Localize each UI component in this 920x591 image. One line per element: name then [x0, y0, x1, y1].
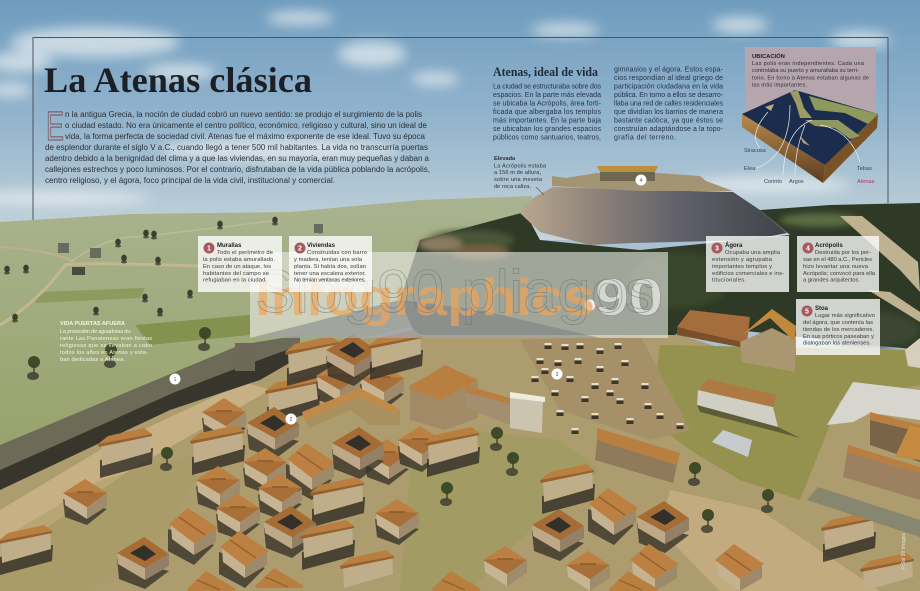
callout: Acrópolis: Acrópolis; convocó para ella: [803, 271, 876, 277]
map block: [742, 90, 878, 183]
callout: Acrópolis: 4: [806, 246, 810, 252]
drop cap: E: [46, 103, 64, 149]
panel: location: torio. En torno a Atenas estaban algunas de: [752, 76, 869, 82]
callout: Ágora: Ágora: [725, 242, 743, 249]
note: Elevada: de roca caliza.: [494, 184, 531, 190]
marker 1 on the wall: [170, 374, 180, 384]
callout: Viviendas: planta. Si había dos, solían: [294, 264, 366, 270]
callout: Ágora: edificios comerciales e ins-: [712, 271, 784, 277]
intro text: de esplendor durante el siglo V a.C., cuando llegó a tener 500 mil habitantes. La vida no transcurría puertas: [45, 143, 428, 152]
panel: location: UBICACIÓN: [752, 52, 785, 60]
column text right: que dividían los barrios de manera: [614, 109, 723, 116]
intro text: centro religioso, y el ágora, foco principal de la vida civil, institucional y comercial.: [45, 176, 335, 185]
note: Vida puertas afuera: [60, 321, 152, 363]
column text left: [493, 84, 602, 142]
column text right: gimnasios y el ágora. Estos espa-: [614, 66, 724, 74]
background: ground of the city: [0, 335, 920, 591]
background: green hills: [0, 196, 532, 470]
column text right: bastante caótica, ya que éstos se: [614, 118, 723, 124]
callout: Viviendas: tener una escalera exterior.: [294, 271, 366, 277]
image credit: © Sol 90 Images: [900, 532, 907, 570]
column text left: ficada que albergaba los templos: [493, 109, 602, 116]
marker 1 on the wall: 1: [174, 377, 177, 383]
callout: Ágora: importantes templos y: [712, 264, 772, 270]
callout: Murallas: [198, 236, 282, 292]
background: sky with clouds: [0, 0, 920, 240]
column text left: La ciudad se estructuraba sobre dos: [493, 84, 602, 90]
marker 4 on the acropolis: 4: [640, 178, 643, 184]
watermark band: Infographics: [255, 269, 595, 327]
city houses: [0, 330, 914, 591]
map labels: Tebas: [857, 166, 872, 172]
map labels: [744, 148, 875, 185]
note: Vida puertas afuera: ban dedicadas a Atenea.: [60, 357, 125, 363]
callout: Stoa: En sus pórticos paseaban y: [803, 334, 874, 340]
note: Vida puertas afuera: rante Las Panateneas eran fiestas: [60, 336, 152, 342]
callout: Murallas: refugiaban en la ciudad.: [203, 278, 267, 284]
callout: Stoa: 5: [805, 308, 809, 316]
callout: Ágora: extensión y agrupaba: [712, 257, 773, 263]
markers 2, 3 and 5: 3: [556, 372, 559, 378]
callout: Viviendas: y madera, tenían una sola: [294, 257, 363, 263]
markers 2, 3 and 5: 2: [290, 417, 293, 423]
callout: Acrópolis: Acrópolis: [815, 243, 843, 249]
map labels: Siracusa: [744, 148, 767, 154]
column text right: participación ciudadana en la vida: [614, 84, 723, 90]
callout: Stoa: Lugar más significativo: [815, 313, 875, 319]
callout: Murallas: Todo el perímetro de: [217, 250, 273, 256]
intro text: vida, la forma perfecta de sociedad civil. Atenas fue el máximo exponente de ese ideal. Tuvo su época: [65, 132, 426, 141]
column text left: espacios. En la parte más elevada: [493, 92, 601, 99]
callout: Ágora: Ocupaba una amplia: [725, 250, 781, 256]
large public buildings: [302, 309, 920, 537]
callout: Viviendas: No tenían ventanas exteriores.: [294, 278, 366, 284]
note: Vida puertas afuera: religiosas que se llevaban a cabo: [60, 343, 152, 349]
intro text: adentro debido a la benignidad del clima y a que las viviendas, en su mayoría, eran muy pequeñas y daban a: [45, 154, 430, 163]
callout: Acrópolis: hizo levantar una nueva: [803, 264, 869, 270]
callout: Viviendas: Construidas con barro: [307, 250, 367, 256]
callout: Murallas: habitantes del campo se: [203, 271, 269, 277]
panel: location: Las polis eran independientes. Cada una: [752, 61, 865, 67]
column text right: grafía del terreno.: [614, 134, 676, 142]
column text left: se ubicaban los grandes espacios: [493, 126, 602, 133]
callout: Murallas: Murallas: [217, 243, 242, 249]
callout: Ágora: 3: [715, 246, 719, 252]
callout: Stoa: del ágora, que contenía las: [803, 320, 873, 326]
column text right: construían adaptándose a la topo-: [614, 126, 724, 133]
heading: Atenas, ideal de vida: Atenas, ideal de vida: [493, 65, 599, 79]
map labels: Corinto: [764, 179, 782, 185]
callout: Acrópolis: a grandes arquitectos.: [803, 278, 860, 284]
callout: Viviendas: Viviendas: [307, 243, 336, 249]
panel: location: las más importantes.: [752, 82, 807, 88]
callout: Ágora: titucionales.: [712, 278, 746, 284]
callout: Viviendas: [289, 236, 372, 292]
callout: Murallas: la polis estaba amurallado.: [203, 257, 275, 263]
note: Vida puertas afuera: La procesión de aguadoras du-: [60, 329, 132, 335]
acropolis rock and temple: [520, 166, 787, 245]
map labels: Argos: [789, 179, 804, 185]
frame line: [33, 38, 888, 220]
map labels: Elea: [744, 166, 756, 172]
callout: Murallas: En caso de un ataque, los: [203, 264, 271, 270]
note: Elevada: a 156 m de altura,: [494, 170, 541, 176]
panel: location: [742, 47, 878, 185]
callout: Stoa: [796, 299, 880, 355]
column text right: cios respondían al ideal griego de: [614, 75, 723, 82]
callout: Stoa: tiendas de los mercaderes.: [803, 327, 874, 333]
intro text: n la antigua Grecia, la noción de ciudad cobró un nuevo sentido: se produjo el surgimiento de la polis: [65, 110, 422, 119]
marker 4 on the acropolis: [636, 174, 646, 186]
map labels: Atenas: [857, 179, 875, 185]
agora market stalls: [160, 335, 774, 533]
markers 2, 3 and 5: [286, 300, 596, 424]
note: Elevada: Elevada: [494, 156, 516, 162]
callout: Acrópolis: sas en el 480 a.C., Pericles: [803, 257, 872, 263]
callout: Ágora: [706, 236, 789, 292]
watermark band: 90: [595, 269, 663, 327]
callout: Stoa: dialogaban los atenienses.: [803, 340, 871, 346]
callout: Stoa: Stoa: [815, 306, 829, 312]
column text left: se ubicaba la Acrópolis, área forti-: [493, 100, 602, 108]
note: Vida puertas afuera: todos los años en Atenas y esta-: [60, 350, 148, 356]
watermark band: Slog90 pliagos: [255, 258, 655, 325]
intro text: [45, 110, 430, 185]
callout: Acrópolis: Destruida por los per-: [815, 250, 871, 256]
callout: Murallas: 1: [207, 246, 211, 252]
background: wooded slope and distant town: [400, 203, 920, 350]
column text left: más importantes. En la parte baja: [493, 118, 601, 124]
note: Elevada: sobre una meseta: [494, 177, 543, 183]
intro text: o ciudad estado. No era únicamente el centro político, económico, religioso y cultural, sino un ideal de: [65, 121, 428, 130]
callout: Viviendas: 2: [298, 246, 302, 252]
markers 2, 3 and 5: 5: [589, 303, 592, 309]
note: Vida puertas afuera: VIDA PUERTAS AFUERA: [60, 321, 125, 327]
callout: Acrópolis: [797, 236, 879, 292]
column text right: llaba una red de calles residenciales: [614, 100, 724, 108]
intro text: callejones estrechos y poco luminosos. Por el contrario, disfrutaban de la vida pública poblando la acrópolis,: [45, 165, 430, 174]
title: La Atenas clásica: [44, 60, 312, 100]
note: Elevada: La Acrópolis estaba: [494, 164, 547, 170]
column text right: pública. En torno a ellos se desarro-: [614, 92, 724, 99]
column text right: [614, 66, 724, 142]
note: Elevada: [494, 156, 547, 195]
panel: location: controlaba su puerto y amurallaba su terri-: [752, 68, 859, 74]
column text left: públicos como santuarios, teatros,: [493, 134, 601, 142]
